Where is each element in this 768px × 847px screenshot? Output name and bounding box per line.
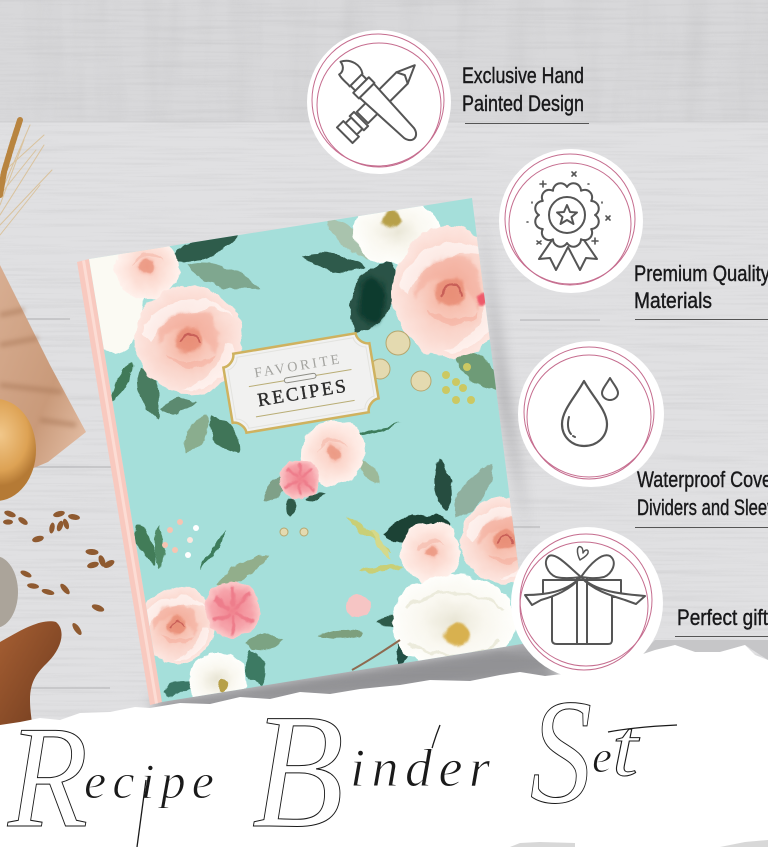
label plate bbox=[221, 331, 381, 435]
feature: hand painted design: Painted Design bbox=[462, 91, 584, 116]
badge circle bbox=[307, 30, 451, 174]
floral artwork bbox=[89, 206, 519, 698]
dough figure bbox=[0, 621, 62, 725]
icon: rosette award bbox=[527, 172, 610, 270]
feature text: Exclusive Hand bbox=[462, 63, 584, 88]
recipe binder bbox=[77, 198, 549, 706]
book shadow bbox=[150, 205, 560, 745]
title: Recipe Binder Set: ecipe bbox=[84, 753, 214, 809]
burlap loaf bbox=[0, 556, 18, 628]
shadow at right of torn paper bbox=[640, 640, 768, 660]
title: Recipe Binder Set: e bbox=[592, 731, 612, 782]
feature: hand painted design bbox=[307, 30, 589, 174]
icon: brush and pencil bbox=[331, 55, 423, 146]
kitchen props: wheat, paper, bread, seeds bbox=[0, 120, 116, 725]
title: Recipe Binder Set bbox=[7, 669, 677, 847]
icon: gift box bbox=[525, 547, 645, 644]
badge circle bbox=[518, 341, 664, 487]
icon: water drops bbox=[562, 378, 618, 446]
feature: perfect gift bbox=[511, 527, 768, 679]
title: Recipe Binder Set: inder bbox=[350, 738, 491, 798]
torn paper shadow bbox=[150, 652, 560, 709]
leaves bbox=[302, 252, 366, 274]
label word: recipes: RECIPES bbox=[256, 375, 350, 411]
brown paper bbox=[0, 265, 86, 472]
twig bbox=[352, 640, 400, 670]
title: Recipe Binder Set: S bbox=[530, 669, 592, 835]
seeds bbox=[3, 509, 116, 636]
feature: premium quality materials bbox=[499, 149, 768, 320]
rolling pin bbox=[284, 373, 316, 383]
binder cover bbox=[89, 198, 528, 702]
badge circle bbox=[499, 149, 643, 293]
feature: premium quality materials: Materials bbox=[634, 288, 712, 313]
title: Recipe Binder Set: t bbox=[612, 702, 641, 793]
gold berries and buds bbox=[442, 363, 475, 404]
confetti spray bbox=[162, 519, 199, 558]
badge circle bbox=[511, 527, 663, 679]
roses and peonies bbox=[89, 254, 144, 354]
torn white paper with title bbox=[0, 645, 768, 847]
wheat stalks bbox=[0, 120, 52, 235]
binder spine bbox=[77, 259, 162, 705]
label word: favorite: FAVORITE bbox=[253, 352, 343, 381]
feature: waterproof covers bbox=[518, 341, 768, 528]
bread roll bbox=[0, 399, 36, 501]
